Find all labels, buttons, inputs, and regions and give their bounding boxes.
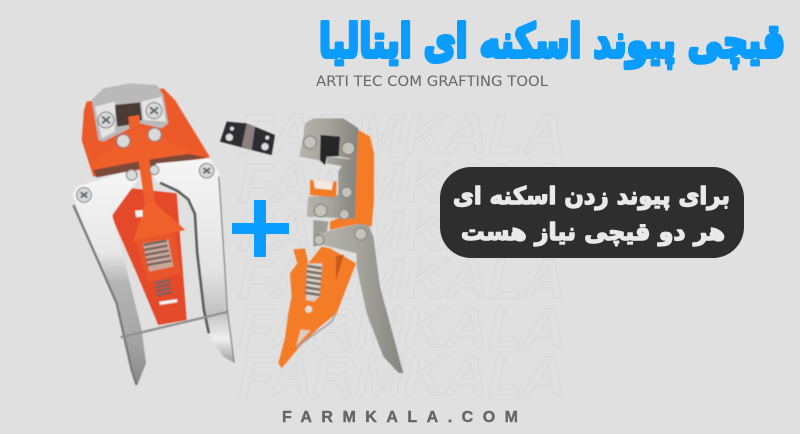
- watermark: repeated FARMKALA: [238, 102, 566, 407]
- handle opening: [296, 329, 311, 346]
- steel top plate: [92, 83, 168, 142]
- lower orange wedge: [112, 188, 187, 325]
- orange body: [82, 88, 210, 177]
- small white marks: [135, 210, 177, 305]
- callout line 1: برای پیوند زدن اسکنه ای: [453, 182, 730, 210]
- screws: [77, 103, 214, 202]
- footer: website: FARMKALA.COM: [282, 409, 518, 426]
- orange lower handle: [278, 247, 356, 368]
- icon: blue plus sign: [232, 200, 289, 257]
- hook hole: [305, 306, 312, 313]
- watermark: repeated FARMKALA: FARMKALA: [238, 247, 566, 310]
- screw slots: [81, 107, 210, 198]
- head slot: [320, 135, 340, 165]
- screws: [304, 136, 367, 245]
- callout line 2: هر دو قیچی نیاز هست: [461, 218, 725, 246]
- watermark: repeated FARMKALA: FARMKALA: [238, 102, 566, 165]
- watermark: repeated FARMKALA: FARMKALA: [238, 344, 566, 407]
- orange anvil: [310, 180, 337, 197]
- watermark: repeated FARMKALA: FARMKALA: [238, 296, 566, 359]
- spring window: [143, 239, 173, 272]
- orange upper body: [330, 130, 374, 230]
- dark gap under wings: [93, 154, 207, 177]
- plate highlight: [95, 97, 166, 138]
- subtitle: english product name: ARTI TEC COM GRAFTING TOOL: [316, 74, 548, 90]
- wire clip: [121, 312, 228, 337]
- spring frame: [135, 233, 181, 283]
- steel stem: [313, 220, 328, 247]
- watermark: repeated FARMKALA: FARMKALA: [238, 199, 566, 262]
- left steel handle: [73, 173, 146, 385]
- right handle outer edge: [219, 177, 234, 362]
- tool: left grafting shears: [73, 83, 235, 385]
- right steel handle: [150, 158, 235, 363]
- wire: [296, 313, 336, 348]
- blade slot: [115, 102, 142, 127]
- steel head: [299, 118, 358, 165]
- steel arm: [307, 157, 357, 218]
- white pad: [313, 180, 333, 190]
- tool: right grafting shears: [278, 118, 403, 373]
- right handle dark inner edge: [160, 183, 209, 333]
- handle slot: [336, 255, 344, 281]
- spring: [305, 266, 322, 295]
- spring: [143, 241, 172, 295]
- watermark: repeated FARMKALA: FARMKALA: [238, 151, 566, 214]
- steel handle: [320, 224, 403, 373]
- left handle dark edge: [73, 205, 137, 385]
- spring gap: [306, 263, 322, 302]
- orange center stem: [128, 115, 185, 243]
- callout: dark pill: [440, 167, 744, 258]
- icon: metal bracket: [220, 122, 275, 155]
- orange wings: [92, 128, 188, 172]
